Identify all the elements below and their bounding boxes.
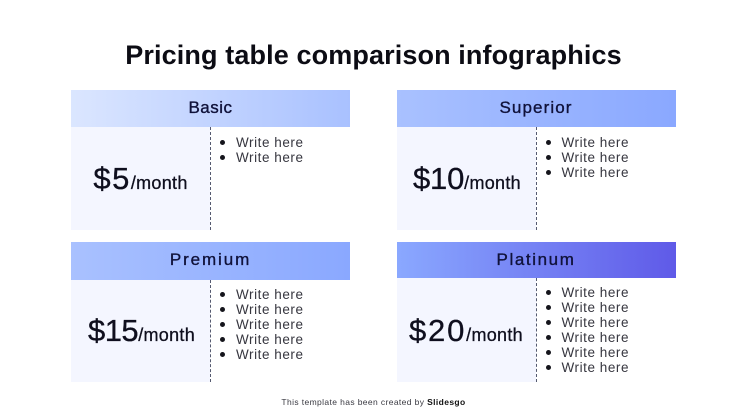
panel: Platinum xyxy=(397,242,676,382)
feature list: Basic xyxy=(220,135,304,165)
panel: Basic xyxy=(71,90,350,230)
heading: Superior: Superior xyxy=(499,98,573,117)
price column: Superior xyxy=(396,127,536,230)
feature list: Premium: Write here xyxy=(236,332,304,347)
feature list: Premium xyxy=(220,287,304,362)
feature list: Platinum: Write here xyxy=(562,330,629,345)
panel: Premium xyxy=(71,242,350,382)
credit line: This template has been created by Slidesgo xyxy=(281,397,466,407)
feature list: Platinum xyxy=(546,285,629,375)
price: $15/month: $15/month xyxy=(88,313,195,348)
heading: Premium: Premium xyxy=(170,250,251,269)
feature list: Premium: Write here xyxy=(236,287,304,302)
panel: Superior xyxy=(397,90,676,230)
price: $5/month: $5/month xyxy=(93,161,188,196)
price: $20/month: $20/month xyxy=(409,313,523,348)
price: $10/month: $10/month xyxy=(413,161,521,196)
heading: Basic xyxy=(71,90,350,127)
heading: Platinum: Platinum xyxy=(497,250,575,269)
title: Pricing table comparison infographics xyxy=(125,40,622,70)
feature list: Premium: Write here xyxy=(236,302,304,317)
feature list: Platinum: Write here xyxy=(562,285,629,300)
feature list: Platinum: Write here xyxy=(562,315,629,330)
feature list: Premium: Write here xyxy=(236,317,304,332)
feature list: Superior xyxy=(546,135,629,180)
feature list: Premium: Write here xyxy=(236,347,304,362)
feature list: Superior: Write here xyxy=(562,135,629,150)
divider: Premium xyxy=(210,280,211,382)
feature list: Superior: Write here xyxy=(562,165,629,180)
feature list: Platinum: Write here xyxy=(562,345,629,360)
heading: Basic: Basic xyxy=(188,98,233,117)
feature list: Basic: Write here xyxy=(236,150,304,165)
divider: Superior xyxy=(536,127,537,230)
divider: Platinum xyxy=(536,278,537,382)
price column: Basic xyxy=(71,127,210,230)
feature list: Superior: Write here xyxy=(562,150,629,165)
divider: Basic xyxy=(210,127,211,230)
price column: Platinum xyxy=(396,278,536,382)
heading: Platinum xyxy=(396,242,676,278)
feature list: Basic: Write here xyxy=(236,135,304,150)
heading: Superior xyxy=(396,90,676,127)
heading: Premium xyxy=(71,242,350,280)
feature list: Platinum: Write here xyxy=(562,360,629,375)
price column: Premium xyxy=(71,280,210,382)
feature list: Platinum: Write here xyxy=(562,300,629,315)
